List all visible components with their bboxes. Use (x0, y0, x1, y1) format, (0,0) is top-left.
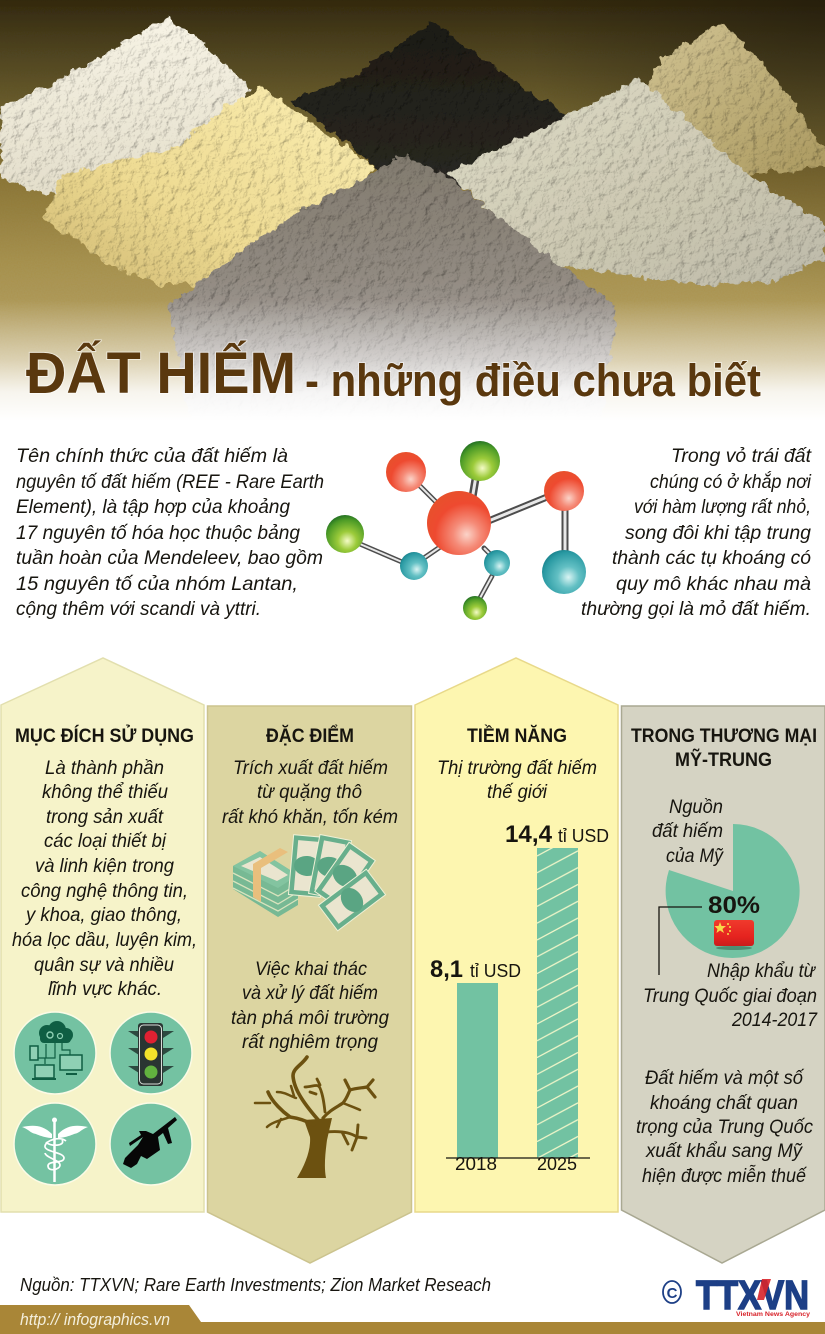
text: tariff exemption: Đất hiếm và một số (645, 1068, 804, 1089)
text: uses: Là thành phần (45, 758, 164, 779)
value: 80%: 80% (708, 892, 760, 919)
value label: 14,4 (505, 821, 609, 848)
text: uses: hóa lọc dầu, luyện kim, (12, 930, 197, 951)
heading: trong thương mại mỹ-trung: MỸ-TRUNG (675, 749, 772, 771)
icon: assault rifle (110, 1103, 192, 1185)
value label: 8,1 (430, 956, 521, 983)
text: extraction (222, 758, 398, 828)
icon: china flag (714, 920, 754, 950)
intro text left (16, 446, 324, 620)
intro text left: 15 nguyên tố của nhóm Lantan, (16, 574, 298, 595)
text: uses (12, 758, 197, 1000)
icon: computer network (14, 1012, 96, 1094)
icon: dead tree (255, 1057, 375, 1178)
value label: 8,1: 8,1 (430, 956, 463, 983)
axis labels (455, 1154, 577, 1174)
bar: 2018 (457, 983, 498, 1158)
text: uses: không thể thiếu (42, 782, 168, 803)
heading: trong thương mại mỹ-trung (631, 726, 817, 771)
intro text left: nguyên tố đất hiếm (REE - Rare Earth (16, 472, 324, 493)
text: imports: Nhập khẩu từ (707, 961, 817, 982)
text: uses: lĩnh vực khác. (48, 979, 162, 1000)
text: environment: rất nghiêm trọng (242, 1032, 378, 1053)
pile: white (0, 18, 250, 200)
hero photo: piles of rare earth powders (0, 0, 825, 425)
text: environment: tàn phá môi trường (231, 1008, 389, 1029)
icon: medical caduceus (14, 1103, 96, 1185)
value label: 14,4: 14,4 (505, 821, 553, 848)
text: tariff exemption (636, 1068, 813, 1187)
intro text left: Element), là tập hợp của khoảng (16, 497, 290, 518)
pile: black (292, 22, 572, 190)
leader line (659, 907, 702, 975)
text: us source: của Mỹ (666, 846, 724, 867)
footer band (0, 1305, 825, 1334)
title: - những điều chưa biết (305, 355, 761, 406)
pile: beige far right (640, 23, 825, 172)
text: environment (231, 959, 389, 1053)
website url: http:// infographics.vn (20, 1310, 170, 1329)
intro text right: quy mô khác nhau mà (616, 574, 811, 595)
text: uses: công nghệ thông tin, (21, 881, 188, 902)
text: imports (643, 961, 818, 1031)
pile: grey front (168, 154, 617, 392)
text: market: Thị trường đất hiếm (437, 758, 597, 779)
text: uses: y khoa, giao thông, (24, 905, 182, 926)
text: uses: trong sản xuất (46, 807, 164, 828)
intro text right: Trong vỏ trái đất (671, 446, 812, 467)
text: imports: 2014-2017 (731, 1010, 818, 1031)
heading: trong thương mại mỹ-trung: TRONG THƯƠNG MẠI (631, 726, 817, 747)
bar: 2025 (537, 848, 578, 1158)
text: uses: và linh kiện trong (35, 856, 174, 877)
text: extraction: từ quặng thô (257, 782, 362, 803)
value label: 8,1: tỉ USD (470, 961, 521, 981)
text: us source: Nguồn (669, 797, 723, 818)
intro text left: cộng thêm với scandi và yttri. (16, 599, 261, 620)
text: uses: các loại thiết bị (44, 831, 167, 852)
heading: tiềm năng: TIỀM NĂNG (467, 725, 567, 747)
title: ĐẤT HIẾM (26, 341, 296, 406)
pile: light grey right (447, 78, 825, 285)
title (26, 341, 761, 406)
text: environment: Việc khai thác (255, 959, 367, 980)
text: extraction: rất khó khăn, tốn kém (222, 807, 398, 828)
text: tariff exemption: hiện được miễn thuế (642, 1166, 807, 1187)
intro text left: 17 nguyên tố hóa học thuộc bảng (16, 523, 300, 544)
intro text left: Tên chính thức của đất hiếm là (16, 446, 288, 467)
molecule illustration (326, 441, 586, 620)
panel: mục đích sử dụng (1, 658, 204, 1212)
intro text right: chúng có ở khắp nơi (650, 472, 812, 493)
panel: tiềm năng (415, 658, 618, 1212)
intro text right: thành các tụ khoáng có (612, 548, 811, 569)
icon: traffic light (110, 1012, 192, 1094)
panel: trong thương mại mỹ-trung (622, 706, 825, 1263)
text: tariff exemption: xuất khẩu sang Mỹ (645, 1141, 803, 1162)
heading: đặc điểm: ĐẶC ĐIỂM (266, 725, 354, 747)
intro text left: tuần hoàn của Mendeleev, bao gồm (16, 548, 323, 569)
source line: Nguồn: TTXVN; Rare Earth Investments; Zion Market Reseach (20, 1275, 491, 1295)
text: market: thế giới (487, 782, 548, 803)
logo: TTXVN: Vietnam News Agency (736, 1311, 810, 1318)
logo: TTXVN: C (667, 1285, 678, 1302)
heading: mục đích sử dụng: MỤC ĐÍCH SỬ DỤNG (15, 725, 194, 747)
value label: 14,4: tỉ USD (558, 826, 609, 846)
text: us source (652, 797, 724, 867)
text: uses: quân sự và nhiều (34, 955, 174, 976)
icon: stack of money and banknotes (233, 834, 386, 931)
pile: pale yellow (42, 87, 376, 285)
text: environment: và xử lý đất hiếm (242, 983, 378, 1004)
text: tariff exemption: trọng của Trung Quốc (636, 1117, 813, 1138)
text: tariff exemption: khoáng chất quan (650, 1093, 798, 1114)
intro text right: với hàm lượng rất nhỏ, (634, 497, 811, 518)
intro text right (581, 446, 812, 620)
text: imports: Trung Quốc giai đoạn (643, 986, 817, 1007)
text: market (437, 758, 597, 803)
intro text right: song đôi khi tập trung (625, 523, 811, 544)
axis labels: 2018 (455, 1154, 497, 1174)
text: extraction: Trích xuất đất hiếm (233, 758, 388, 779)
bar chart (430, 821, 609, 1174)
text: us source: đất hiếm (652, 821, 723, 842)
axis labels: 2025 (537, 1154, 577, 1174)
intro text right: thường gọi là mỏ đất hiếm. (581, 599, 811, 620)
panel: đặc điểm (208, 706, 412, 1263)
pie chart 80% (666, 824, 800, 958)
